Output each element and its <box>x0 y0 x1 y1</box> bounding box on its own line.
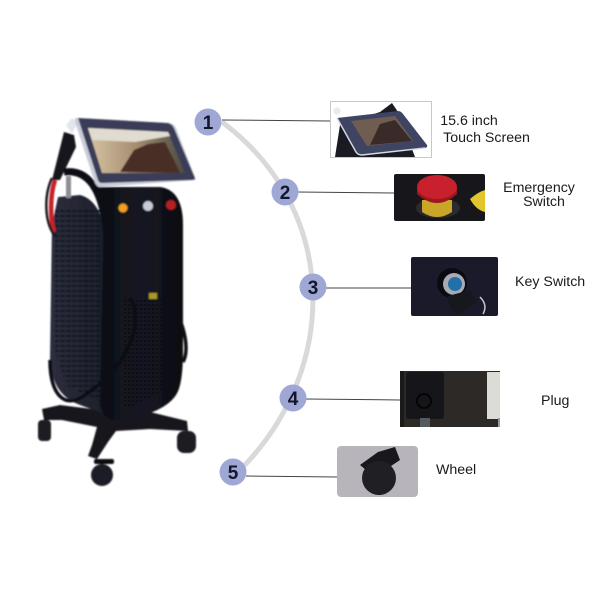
machine cables <box>50 293 186 401</box>
number badge 3: 3 <box>308 278 318 299</box>
machine main front body <box>90 187 183 421</box>
machine base with casters <box>38 405 196 486</box>
label: key switch: Key Switch <box>515 274 585 290</box>
label: touch screen: 15.6 inch <box>440 113 498 129</box>
machine rear panel with vents <box>50 195 108 415</box>
number badge 4: 4 <box>288 389 299 410</box>
number badge 4 <box>280 384 306 412</box>
photo: touch screen <box>330 102 432 158</box>
touch screen <box>75 118 196 187</box>
label: wheel: Wheel <box>436 462 476 478</box>
machine: diode laser device <box>38 118 196 486</box>
number badge 1 <box>194 108 222 136</box>
number badge 1: 1 <box>203 113 214 134</box>
control buttons <box>118 200 176 299</box>
curved connector arc <box>222 122 313 470</box>
photo: key switch <box>411 257 498 316</box>
number badge 2 <box>272 178 298 206</box>
leader lines <box>222 120 411 477</box>
label: plug: Plug <box>541 393 569 409</box>
photo: plug sockets <box>400 371 500 427</box>
label: emergency switch: Emergency <box>503 180 576 196</box>
handpiece and holder <box>46 118 104 236</box>
number badge 3 <box>300 274 326 300</box>
photo: emergency switch <box>394 174 485 221</box>
label: touch screen: Touch Screen <box>443 130 530 146</box>
front vent grille <box>122 300 176 410</box>
number badge 5 <box>220 458 246 486</box>
number badge 2: 2 <box>280 183 290 204</box>
photo: wheel <box>337 446 418 497</box>
label: emergency switch: Switch <box>523 194 565 210</box>
number badge 5: 5 <box>228 463 239 484</box>
